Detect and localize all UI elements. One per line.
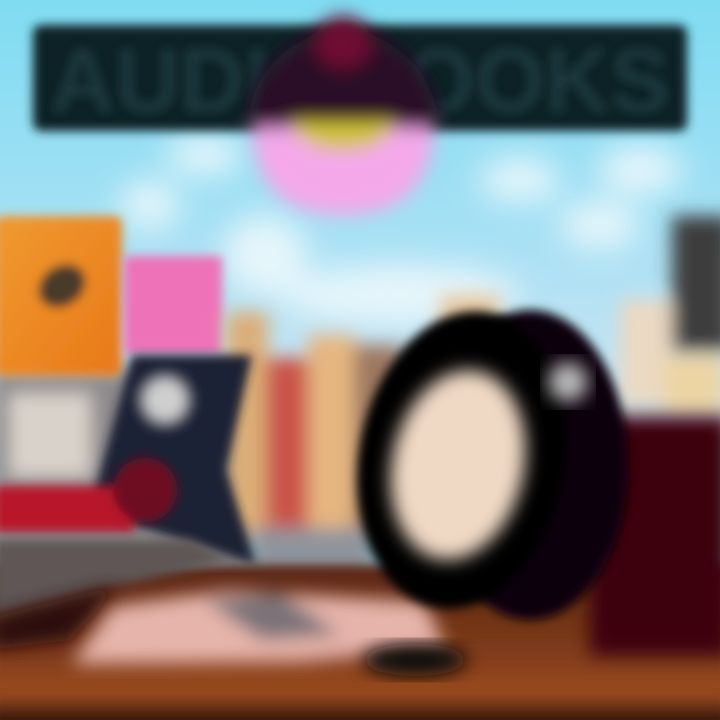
background: sky <box>0 0 720 440</box>
pink book <box>124 256 222 354</box>
headphone outer band <box>432 310 628 620</box>
dark tablet <box>90 355 256 565</box>
title text: AUDIOBOOKS <box>50 30 670 132</box>
grey book stack <box>0 540 230 618</box>
dark red box <box>590 416 720 656</box>
left backing behind books <box>0 370 250 570</box>
table object: dark blob <box>363 644 467 676</box>
ear cup cushion <box>373 357 543 573</box>
right wall frame <box>620 216 720 415</box>
headphones <box>335 294 628 626</box>
upright books <box>226 295 500 578</box>
orange book <box>0 216 122 376</box>
icon: book emblem <box>30 255 94 317</box>
shadow under book stack <box>0 585 120 650</box>
icon: tablet highlight <box>141 376 189 424</box>
headphone highlight <box>548 362 588 402</box>
title emblem: circle badge <box>248 16 438 215</box>
table <box>0 565 720 720</box>
headphone ear cup ring <box>335 294 589 626</box>
title banner <box>33 25 687 132</box>
white book, left <box>8 392 92 478</box>
red book strip <box>0 458 177 532</box>
open book on table <box>72 590 445 664</box>
